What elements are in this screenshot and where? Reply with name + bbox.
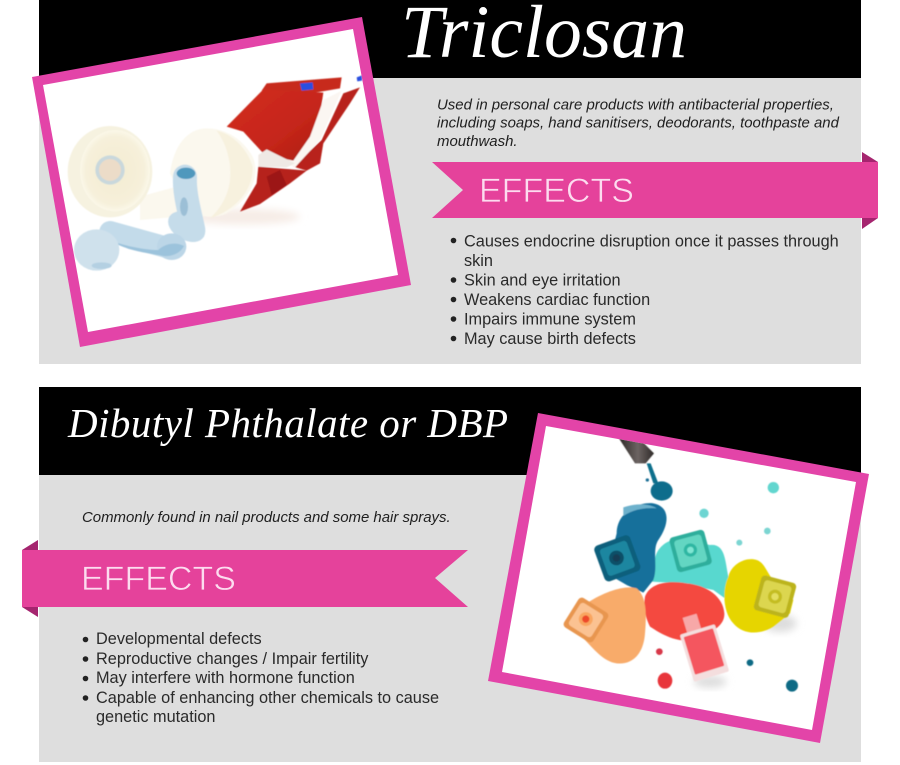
effects list: Triclosan <box>451 232 839 348</box>
ribbon: Effects (Triclosan) <box>432 152 878 229</box>
intro text: Triclosan: including soaps, hand sanitisers, deodorants, toothpaste and <box>437 115 840 132</box>
effects list: DBP: May interfere with hormone function <box>96 669 355 687</box>
title bar: DBP <box>39 387 861 475</box>
ribbon: Effects (DBP) <box>22 540 468 617</box>
photo: toothpaste tube in pink frame <box>32 17 411 347</box>
effects list: Triclosan: skin <box>464 252 493 270</box>
effects list: DBP: Reproductive changes / Impair fertility <box>96 650 369 668</box>
panel: DBP background <box>39 387 861 762</box>
effects list: Triclosan: Impairs immune system <box>464 310 636 328</box>
effects list: DBP: Developmental defects <box>96 630 262 648</box>
ribbon: Effects (DBP): EFFECTS <box>81 560 236 598</box>
heading: Dibutyl Phthalate or DBP: Dibutyl Phthalate or DBP <box>67 400 508 446</box>
intro text: DBP: Commonly found in nail products and some hair sprays. <box>82 509 451 526</box>
panel: Triclosan background <box>39 0 861 364</box>
effects list: DBP: Capable of enhancing other chemicals to cause <box>96 689 439 707</box>
intro text: Triclosan: mouthwash. <box>437 133 518 150</box>
effects list: Triclosan: Causes endocrine disruption once it passes through <box>464 232 839 250</box>
effects list: DBP: genetic mutation <box>96 708 215 726</box>
title bar: Triclosan <box>39 0 861 78</box>
effects list: Triclosan: Skin and eye irritation <box>464 272 621 290</box>
effects list: DBP <box>83 630 439 726</box>
effects list: Triclosan: May cause birth defects <box>464 330 636 348</box>
intro text: Triclosan: Used in personal care products with antibacterial properties, <box>437 96 834 114</box>
ribbon: Effects (Triclosan): EFFECTS <box>479 172 634 210</box>
intro text: Triclosan <box>437 96 840 150</box>
effects list: Triclosan: Weakens cardiac function <box>464 291 650 309</box>
photo: spilled nail polish in pink frame <box>488 413 869 743</box>
